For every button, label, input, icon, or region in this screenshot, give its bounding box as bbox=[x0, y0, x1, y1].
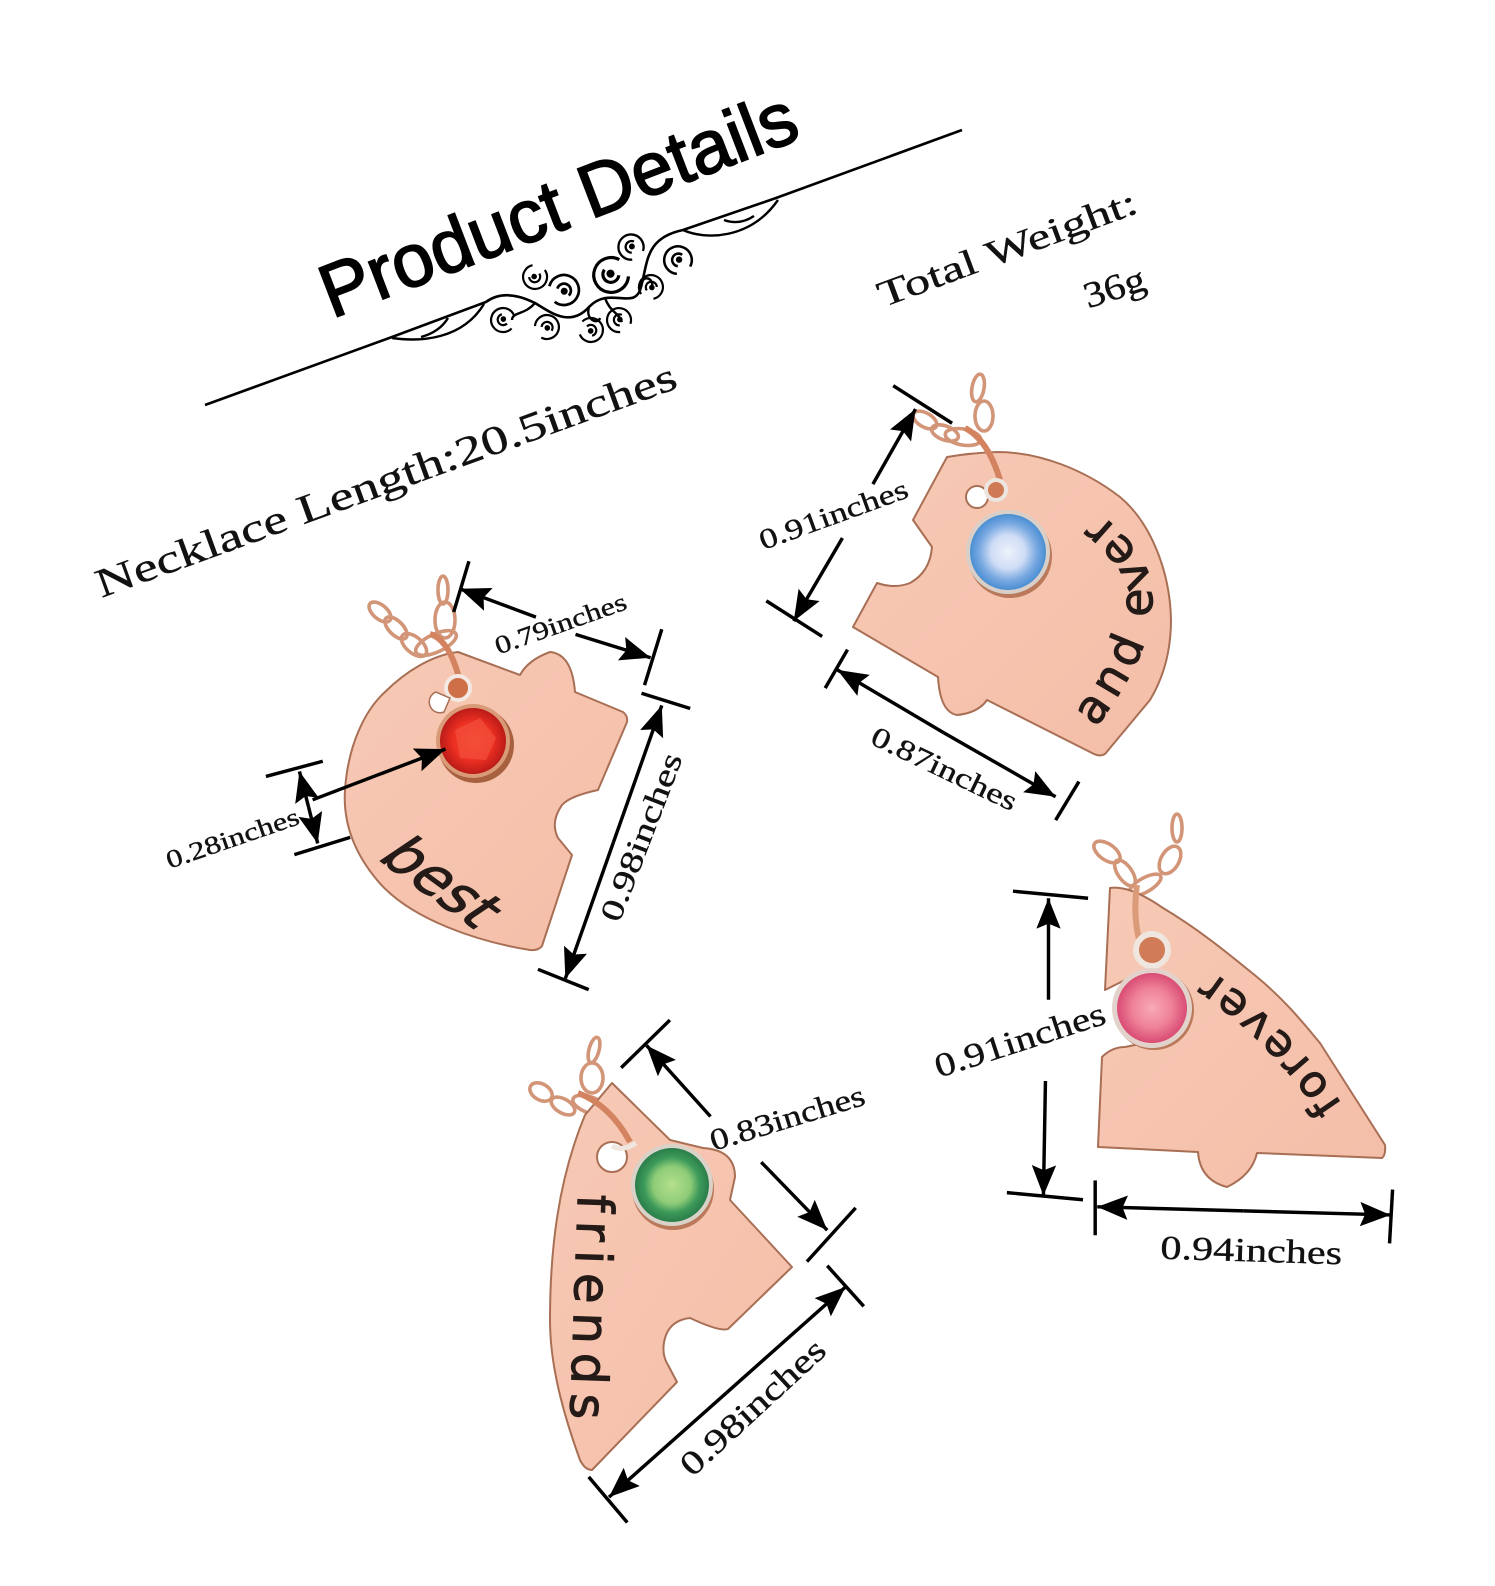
necklace piece: friends bbox=[527, 1036, 792, 1470]
dimension: 0.83 inches bbox=[621, 1020, 869, 1262]
annotations layer bbox=[89, 74, 1393, 1522]
bail: and ever bbox=[986, 480, 1006, 500]
engraved words: and ever: and ever bbox=[1078, 520, 1154, 724]
dimension: 0.98 inches best bbox=[538, 693, 690, 990]
gem: pink bbox=[1112, 968, 1194, 1050]
title: Product Details bbox=[308, 74, 809, 334]
gem: blue bbox=[966, 510, 1052, 598]
jump ring: forever bbox=[1135, 885, 1142, 950]
dimension: 0.87 inches: 0.87inches bbox=[866, 721, 1022, 818]
engraved word: forever: forever bbox=[1196, 976, 1340, 1118]
engraved word: best: best bbox=[364, 827, 521, 938]
weight value: 36g bbox=[1078, 258, 1150, 316]
gem: green bbox=[631, 1144, 714, 1230]
bail: forever bbox=[1136, 934, 1168, 966]
dimension: 0.94 inches: 0.94inches bbox=[1160, 1230, 1343, 1272]
pendant: and ever bbox=[853, 452, 1171, 756]
gem: red bbox=[436, 704, 514, 783]
title ornament bbox=[205, 130, 962, 405]
engraved word: friends: friends bbox=[558, 1194, 624, 1420]
total weight label: Total Weight: bbox=[872, 181, 1143, 315]
dimension: 0.83 inches: 0.83inches bbox=[706, 1078, 869, 1158]
bail: best bbox=[446, 676, 470, 700]
hole: best bbox=[429, 692, 450, 713]
hole: friends bbox=[597, 1142, 627, 1172]
dimension: 0.94 inches bbox=[1095, 1180, 1393, 1272]
hole: and ever bbox=[966, 486, 988, 508]
jump ring: best bbox=[430, 634, 460, 682]
dimension: 0.28 inches bbox=[162, 749, 446, 875]
necklace piece: and ever bbox=[852, 372, 1172, 756]
necklace length label: Necklace Length:20.5inches bbox=[89, 354, 683, 606]
bail: friends bbox=[612, 1143, 636, 1148]
pendant: forever bbox=[1098, 888, 1385, 1187]
chain: and ever bbox=[910, 373, 993, 448]
pendant: best bbox=[345, 652, 627, 950]
dimension: 0.98 inches best: 0.98inches bbox=[593, 748, 689, 926]
necklace piece: forever bbox=[1092, 812, 1386, 1188]
dimension: 0.87 inches bbox=[825, 650, 1079, 820]
jump ring: and ever bbox=[965, 428, 1000, 480]
dimension: 0.91 inches and ever bbox=[755, 386, 952, 636]
dimension: 0.79 inches bbox=[454, 561, 662, 685]
pendant: friends bbox=[550, 1083, 792, 1470]
chain: best bbox=[366, 576, 460, 661]
dimension: 0.91 inches forever: 0.91inches bbox=[930, 995, 1110, 1086]
chain: forever bbox=[1090, 814, 1185, 900]
chain: friends bbox=[527, 1036, 610, 1119]
dimension: 0.98 inches friends: 0.98inches bbox=[673, 1331, 834, 1484]
dimension: 0.91 inches forever bbox=[930, 891, 1110, 1200]
dimension: 0.79 inches: 0.79inches bbox=[491, 588, 630, 660]
dimension: 0.98 inches friends bbox=[589, 1266, 864, 1522]
jump ring: friends bbox=[578, 1093, 630, 1142]
dimension: 0.91 inches and ever: 0.91inches bbox=[755, 474, 913, 557]
dimension: 0.28 inches: 0.28inches bbox=[162, 803, 303, 875]
necklace piece: best bbox=[345, 576, 627, 950]
